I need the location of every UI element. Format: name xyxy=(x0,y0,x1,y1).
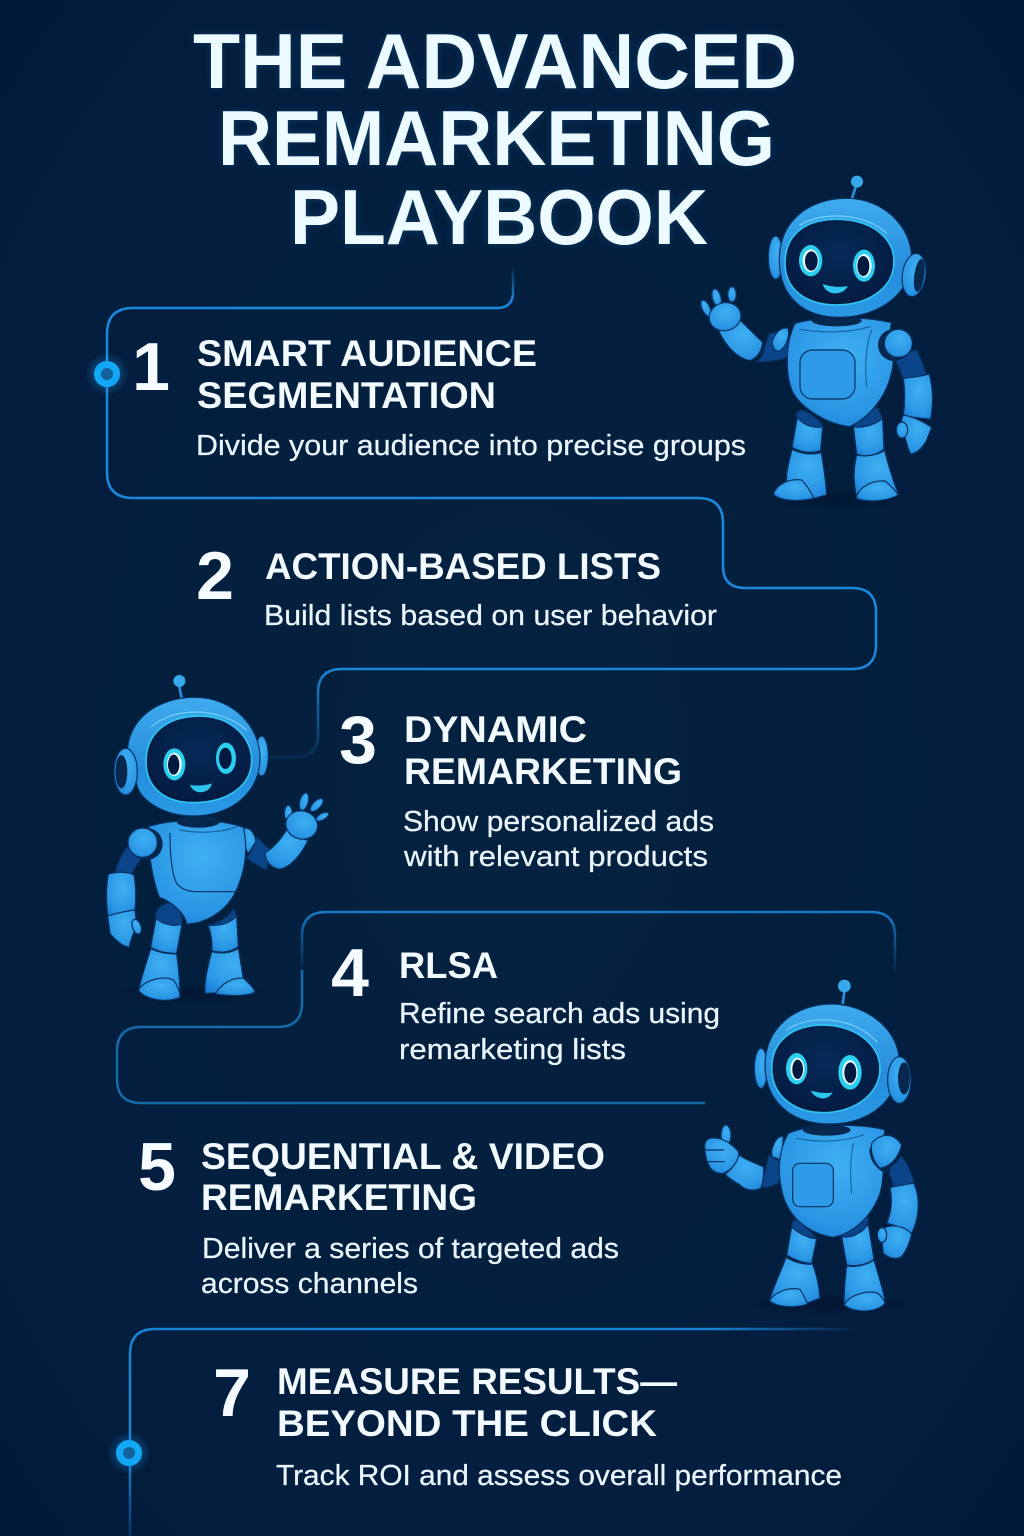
step 1: 1 xyxy=(132,329,170,405)
step 2 xyxy=(196,538,717,632)
step 5: across channels xyxy=(201,1268,418,1300)
step 3: with relevant products xyxy=(403,841,708,873)
step 3: DYNAMIC xyxy=(404,709,587,750)
step 5: SEQUENTIAL & VIDEO xyxy=(201,1136,605,1177)
title: THE ADVANCED xyxy=(193,17,797,105)
step 5: REMARKETING xyxy=(201,1177,477,1218)
step 2: ACTION-BASED LISTS xyxy=(265,546,661,587)
step 4: 4 xyxy=(331,935,369,1011)
title xyxy=(193,17,797,261)
node 7 xyxy=(107,1431,151,1475)
title: REMARKETING xyxy=(218,94,775,182)
step 2: Build lists based on user behavior xyxy=(264,600,717,632)
step 7: 7 xyxy=(213,1355,251,1431)
step 5: 5 xyxy=(138,1129,176,1205)
step 3: Show personalized ads xyxy=(403,806,714,838)
robot 1: waving, upper right xyxy=(699,176,933,510)
step 7 xyxy=(213,1355,842,1492)
step 3 xyxy=(339,702,714,873)
step 7: MEASURE RESULTS— xyxy=(277,1361,677,1402)
step 4: Refine search ads using xyxy=(399,998,720,1030)
step 5 xyxy=(138,1129,619,1300)
node 1 xyxy=(85,352,129,396)
step 4 xyxy=(331,935,720,1066)
connector lines xyxy=(107,265,895,1536)
step 4: remarketing lists xyxy=(399,1034,626,1066)
robot 2: waving, left xyxy=(103,675,330,1005)
robot 3: thumbs up, lower right xyxy=(705,980,918,1315)
step 1: SEGMENTATION xyxy=(197,375,496,416)
step 3: 3 xyxy=(339,702,377,778)
step 5: Deliver a series of targeted ads xyxy=(202,1233,619,1265)
step 7: Track ROI and assess overall performance xyxy=(276,1460,842,1492)
step 4: RLSA xyxy=(399,945,498,986)
step 1 xyxy=(132,329,746,462)
step 3: REMARKETING xyxy=(404,751,682,792)
step 1: Divide your audience into precise groups xyxy=(196,430,746,462)
title: PLAYBOOK xyxy=(290,173,708,261)
step 1: SMART AUDIENCE xyxy=(197,333,537,374)
step 2: 2 xyxy=(196,538,234,614)
step 7: BEYOND THE CLICK xyxy=(277,1403,657,1444)
